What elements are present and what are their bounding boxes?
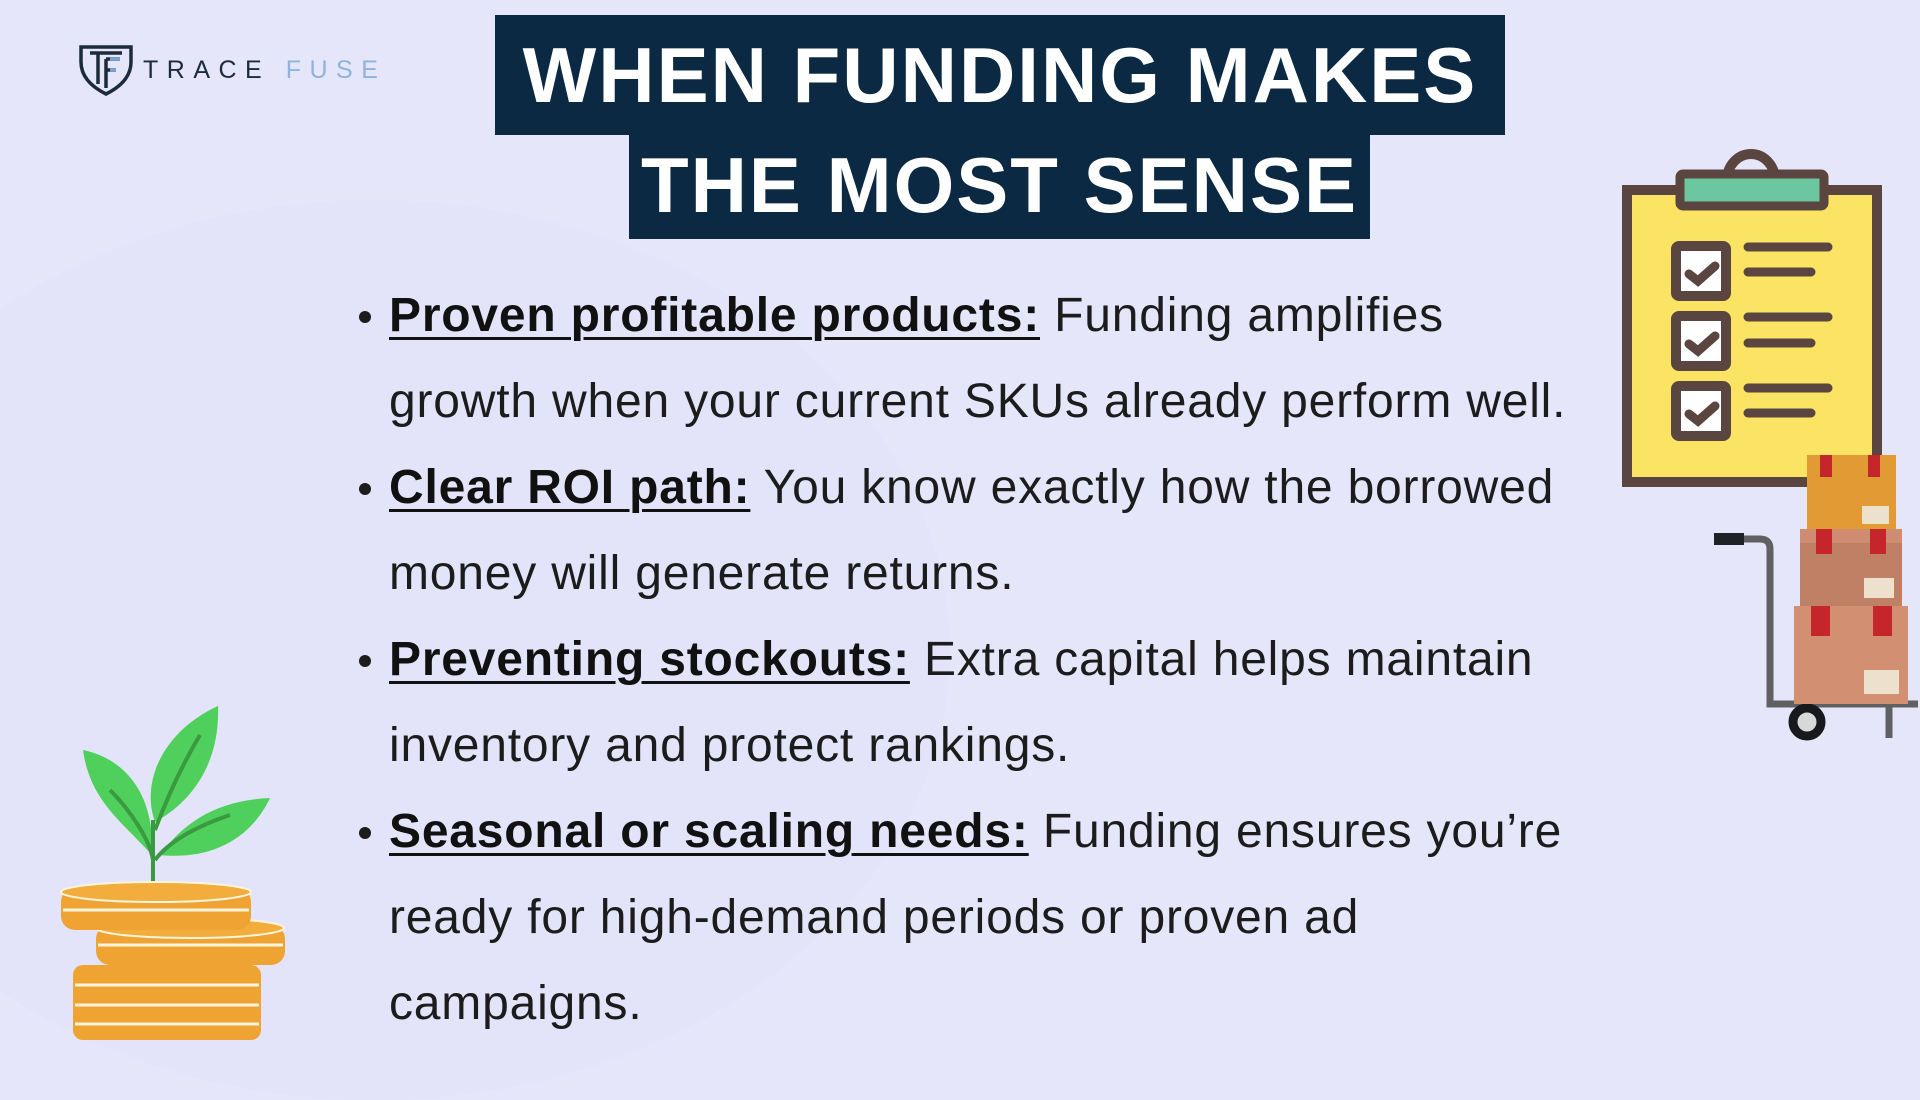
bullet: proven profitable products: Proven profitable products: Funding amplifies (389, 289, 1444, 342)
bullet: clear roi path (389, 445, 1599, 617)
top coins (61, 888, 251, 930)
bullet list (359, 289, 1566, 1030)
title: WHEN FUNDING MAKES (523, 31, 1477, 119)
logo (79, 45, 386, 96)
bullet: proven profitable products (389, 273, 1599, 445)
title: THE MOST SENSE (641, 141, 1358, 229)
bullet: seasonal or scaling needs (389, 789, 1599, 1047)
bullet: clear roi path: money will generate returns. (389, 547, 1014, 600)
icon: clipboard and cart (1622, 149, 1918, 740)
bullet: seasonal or scaling needs: Seasonal or scaling needs: Funding ensures you’re (389, 805, 1562, 858)
bullet: seasonal or scaling needs: campaigns. (389, 977, 642, 1030)
bottom stack (73, 965, 261, 1040)
background decorative shape (0, 200, 950, 1100)
bullet: proven profitable products: growth when your current SKUs already perform well. (389, 375, 1566, 428)
bullet: clear roi path: Clear ROI path: You know exactly how the borrowed (389, 461, 1554, 514)
middle coins (96, 925, 285, 965)
bullet: preventing stockouts: inventory and protect rankings. (389, 719, 1070, 772)
bullet: preventing stockouts: Preventing stockouts: Extra capital helps maintain (389, 633, 1533, 686)
bullet: seasonal or scaling needs: ready for high-demand periods or proven ad (389, 891, 1359, 944)
logo text: TRACE FUSE (143, 56, 386, 84)
title (495, 15, 1505, 239)
icon: plant and coins (60, 706, 285, 1040)
bullet: preventing stockouts (389, 617, 1599, 789)
icon: shield (79, 45, 133, 96)
